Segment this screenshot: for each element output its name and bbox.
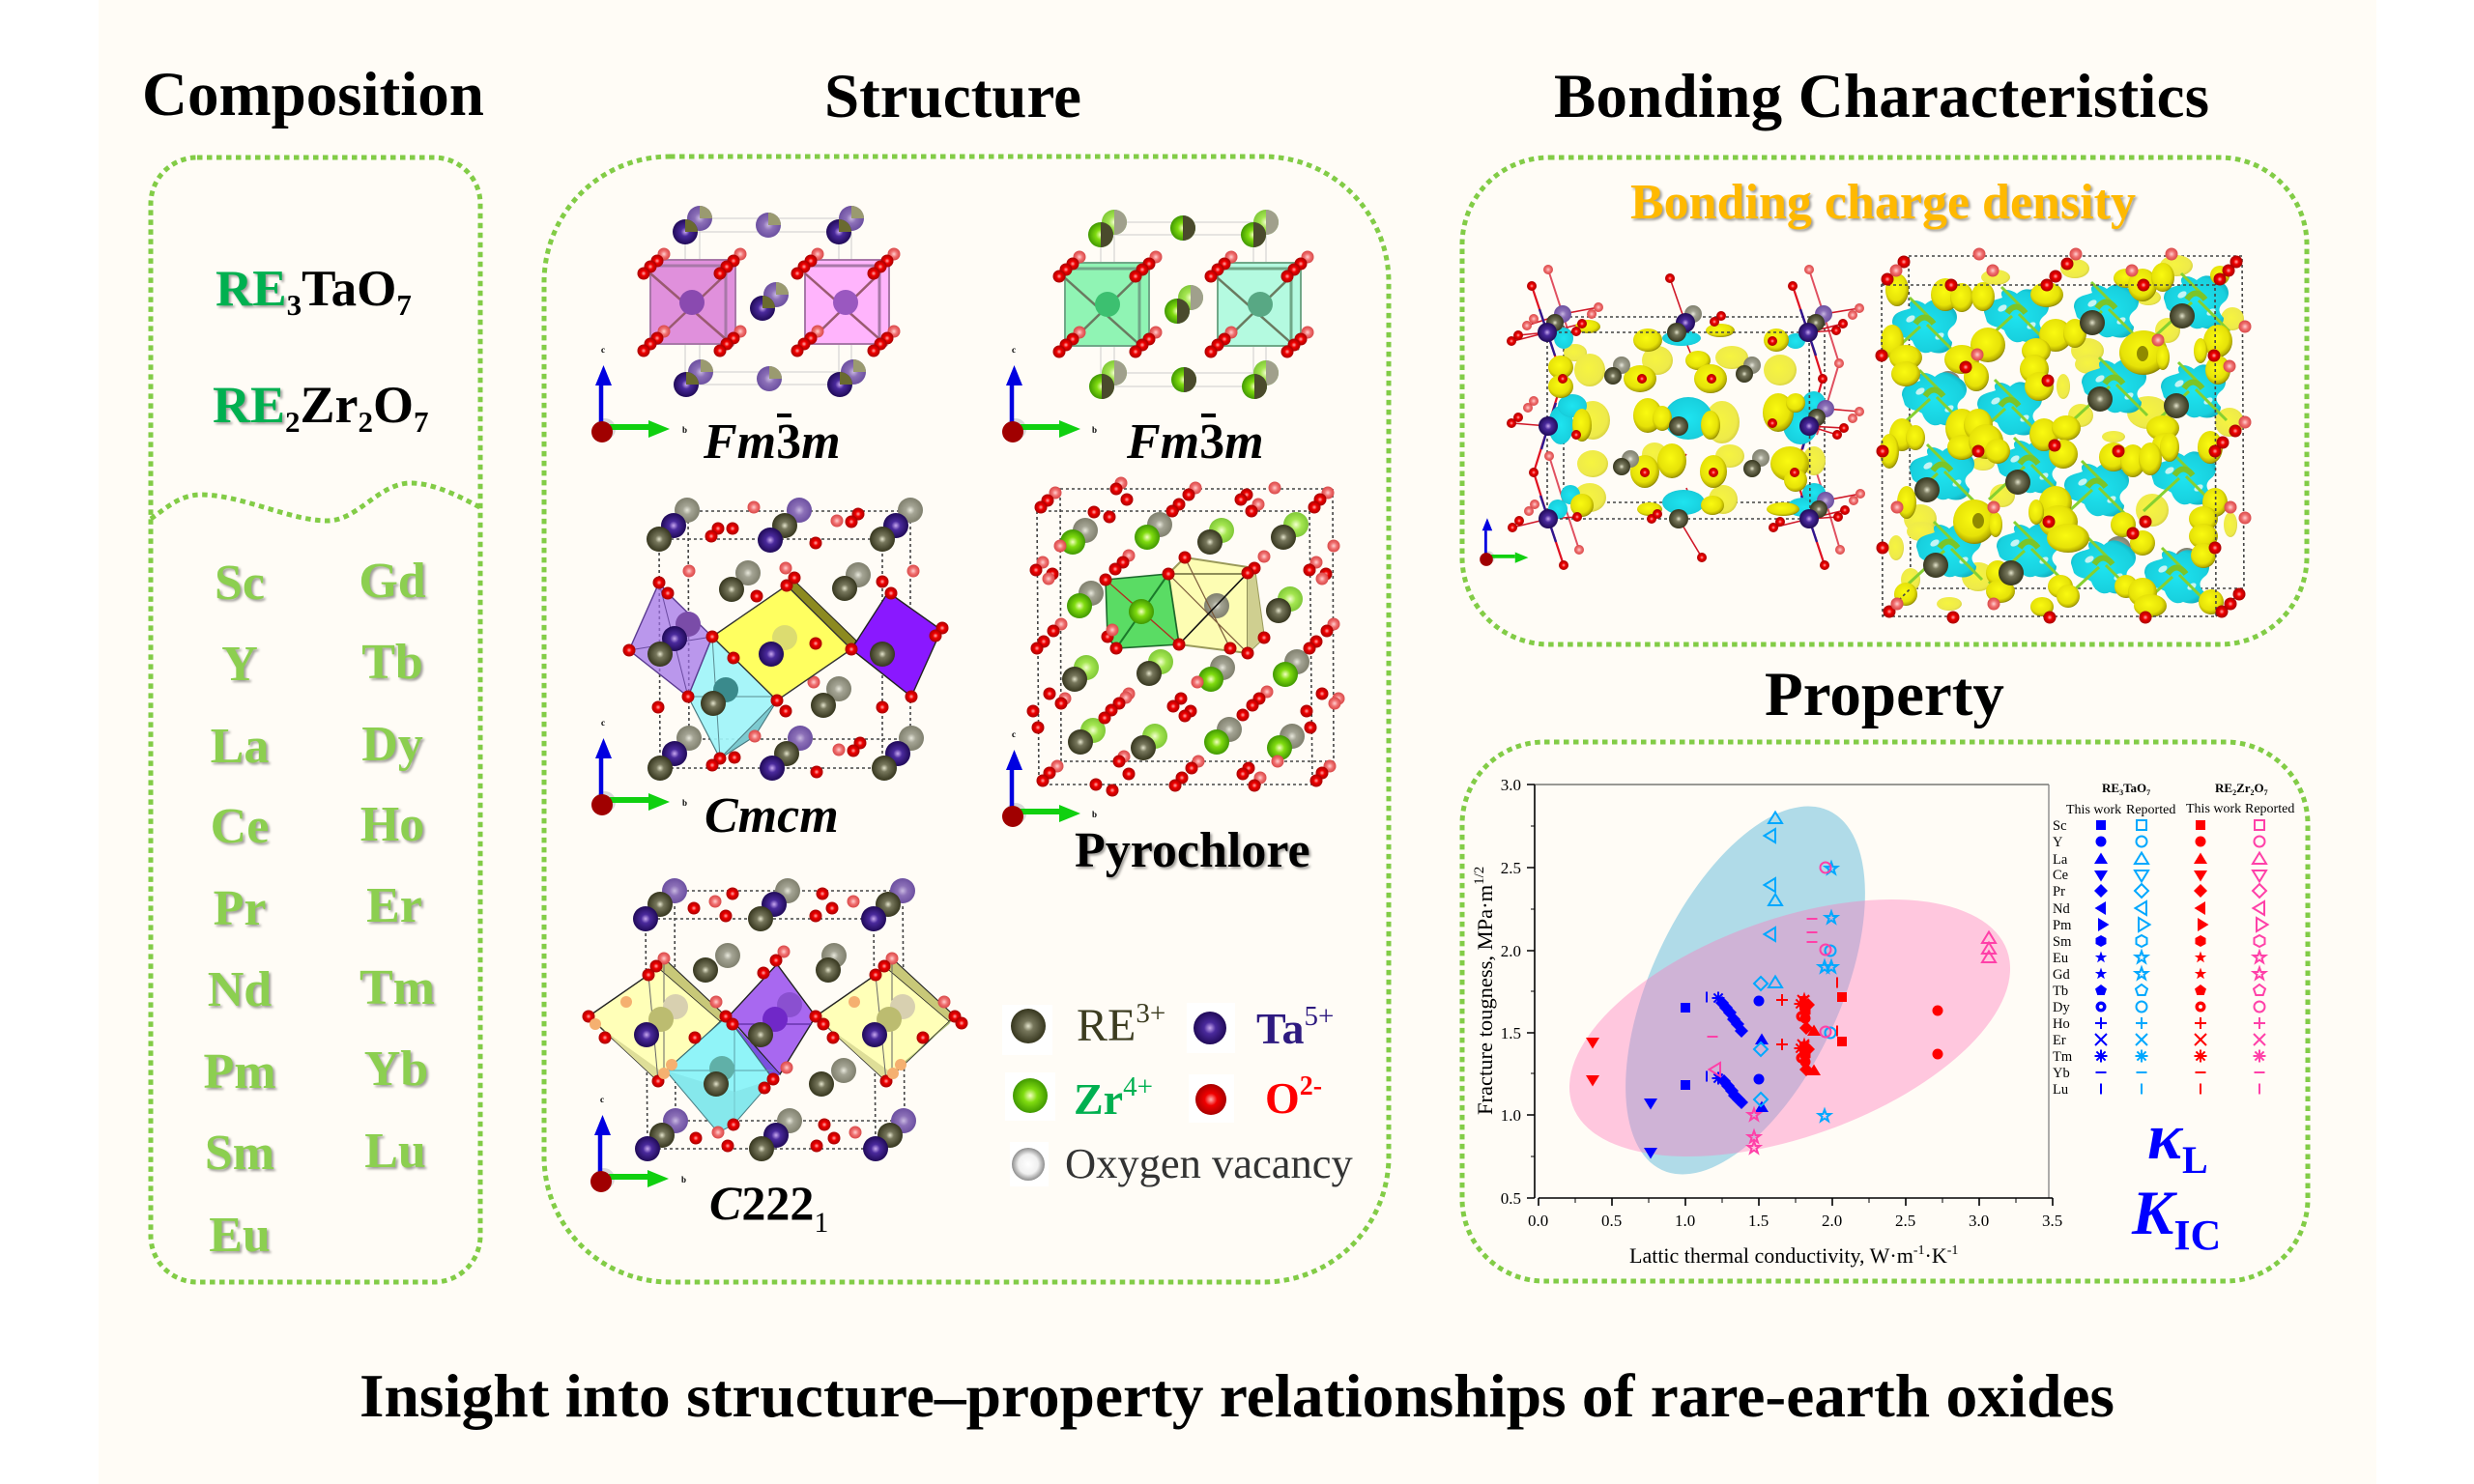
formula: RE2Zr2O7: 2 [285,405,301,439]
panel: composition [151,157,483,1282]
rare-earth element list: Ho [360,797,424,852]
rare-earth element list: Sm [205,1126,274,1181]
legend Zr4+ [1005,1071,1153,1124]
legend column headers: This work [2066,803,2121,817]
legend Ta5+: Ta [1256,1004,1304,1053]
legend markers [2094,820,2267,1094]
symbol: kappa L: L [2182,1138,2208,1182]
chart axes: 1.0 [1675,1212,1695,1230]
legend Ta5+ [1187,1001,1334,1053]
x axis label: -1 [1947,1243,1958,1258]
chart axes: 2.0 [1501,942,1521,960]
rare-earth element list: Er [366,878,422,933]
label: Cmcm: Cmcm [705,788,839,843]
charge density map: left [1507,265,1865,570]
label: Fm-3m left: Fm3m [703,414,841,470]
formula: RE2Zr2O7: 2 [359,405,373,439]
ellipse: RE2Zr2O7 region [1536,848,2044,1208]
rare-earth element list: Dy [361,717,423,772]
chart axes: 3.0 [1501,776,1521,794]
crystal: Pyrochlore [1026,477,1345,796]
legend row labels: Nd [2053,901,2070,917]
legend header: RE2Zr2O7: 7 [2264,788,2268,797]
rare-earth element list: Eu [209,1208,271,1263]
axes: Pyrochlore: c [1012,729,1016,739]
chart axes: 0.5 [1601,1212,1622,1230]
legend RE3+: 3+ [1136,998,1165,1029]
axes: Fm-3m left: b [682,425,687,435]
panel: structure [544,157,1389,1282]
crystal: C2221 [582,878,968,1161]
legend header: RE2Zr2O7: O [2255,781,2264,795]
legend header: RE3TaO7: 3 [2119,788,2123,797]
panel: bonding characteristics [1462,157,2307,644]
axes: Fm-3m left: c [601,345,605,355]
legend column headers: Reported [2126,803,2175,817]
legend header: RE2Zr2O7: 2 [2232,788,2236,797]
axes: Fm-3m left [591,345,687,442]
heading: Structure: Structure [824,62,1081,131]
rare-earth element list: Nd [208,962,272,1017]
rare-earth element list: Tb [361,635,423,690]
rare-earth element list [203,554,435,1263]
legend oxygen vacancy: Oxygen vacancy [1065,1139,1354,1187]
legend RE3+: RE [1077,1000,1136,1051]
legend Ta5+: 5+ [1304,1001,1334,1032]
chart axes: 0.0 [1528,1212,1548,1230]
legend row labels: Pm [2053,918,2072,933]
rare-earth element list: La [211,719,269,774]
subheading: bonding charge density: Bonding charge density [1630,175,2136,230]
axes: Cmcm: b [682,798,687,808]
formula: RE2Zr2O7: 7 [414,405,429,439]
legend column headers: Reported [2245,802,2294,816]
chart axes: 1.0 [1501,1106,1521,1125]
axes: Cmcm [591,718,687,815]
legend header: RE3TaO7: RE [2102,781,2119,795]
axes: C2221: c [600,1095,604,1104]
y axis label: Fracture tougness, MPa·m [1473,885,1497,1115]
chart axes: 2.5 [1501,859,1521,877]
marker legend [2053,781,2294,1098]
charge density map: right [1875,247,2252,624]
chart axes: 3.0 [1969,1212,1989,1230]
label: C2221: 1 [814,1207,828,1239]
legend header: RE2Zr2O7: 2 [2251,788,2255,797]
axes: Fm-3m right: b [1092,425,1097,435]
chart axes: 2.0 [1822,1212,1842,1230]
legend RE3+ [1002,998,1165,1055]
symbol: K IC: IC [2173,1212,2221,1259]
chart axes: 1.5 [1501,1024,1521,1042]
property dotted frame [1462,742,2308,1281]
structure dotted frame [544,157,1389,1282]
label: C2221: C222 [709,1176,814,1230]
legend header: RE3TaO7: TaO [2123,781,2146,795]
chart axes: 1.5 [1748,1212,1769,1230]
legend O2-: 2- [1300,1071,1322,1101]
rare-earth element list: Yb [364,1042,428,1097]
legend header: RE3TaO7: 7 [2146,788,2150,797]
legend header: RE2Zr2O7: RE [2215,781,2232,795]
legend row labels: Tb [2053,984,2068,999]
crystal: Fm-3m zirconate [1053,210,1314,399]
y axis label: 1/2 [1472,867,1487,885]
heading: Property: Property [1765,660,2004,729]
legend row labels: Tm [2053,1049,2073,1065]
x axis label: ·K [1925,1243,1947,1268]
legend column headers: This work [2186,802,2241,816]
panel: property [1462,742,2308,1281]
legend row labels: Pr [2053,884,2065,899]
label: Fm-3m right: Fm3m [1126,414,1264,470]
formula: RE3TaO7: TaO [302,261,396,317]
rare-earth element list: Y [221,637,258,692]
heading: Bonding Characteristics: Bonding Characteristics [1554,62,2209,131]
rare-earth element list: Lu [364,1124,426,1179]
legend row labels: La [2053,852,2068,868]
legend column headers [2066,802,2294,817]
chart axes: 2.5 [1895,1212,1915,1230]
legend O2-: O [1265,1073,1300,1123]
rare-earth element list: Pr [214,881,266,936]
axes: C2221 [590,1095,686,1192]
axes: Fm-3m right: c [1012,345,1016,355]
formula: RE2Zr2O7: RE [213,376,285,434]
formula: RE2Zr2O7: Zr [301,376,359,434]
axes: bonding [1480,518,1528,566]
legend: atoms [1002,998,1354,1187]
legend header: RE2Zr2O7: Zr [2236,781,2251,795]
crystal: Cmcm [622,498,949,781]
label: Pyrochlore: Pyrochlore [1075,823,1310,878]
axes: Fm-3m right [1002,345,1097,442]
legend row labels: Y [2053,835,2063,850]
legend row labels: Sm [2053,934,2072,950]
wavy divider [151,483,483,521]
crystal: Fm-3m tantalate [638,206,901,397]
formula: RE3TaO7: 7 [396,288,412,322]
data points [1586,812,1996,1159]
rare-earth element list: Pm [203,1044,276,1099]
formula: RE3TaO7: 3 [287,288,302,322]
composition dotted frame [151,157,480,1282]
x axis label: Lattic thermal conductivity, W·m [1629,1243,1913,1268]
legend Zr4+: Zr [1074,1074,1123,1124]
ellipse: RE3TaO7 region [1576,771,1914,1210]
legend row labels: Yb [2053,1066,2070,1081]
bonding dotted frame [1462,157,2307,644]
chart axes: 0.5 [1501,1189,1521,1208]
legend row labels: Ho [2053,1016,2070,1032]
symbol: kappa L: κ [2147,1099,2182,1173]
axes: Pyrochlore: b [1092,810,1097,819]
legend row labels: Lu [2053,1082,2068,1098]
legend row labels: Gd [2053,967,2070,983]
axes: Cmcm: c [601,718,605,728]
x axis label: -1 [1913,1243,1925,1258]
chart axes: 3.5 [2042,1212,2062,1230]
axes: Pyrochlore [1002,729,1097,827]
rare-earth element list: Gd [359,554,426,609]
legend row labels: Er [2053,1033,2066,1048]
formula: RE2Zr2O7: O [373,376,414,434]
legend row labels: Eu [2053,951,2068,966]
heading: Composition: Composition [142,60,484,129]
formula: RE3TaO7: RE [216,261,287,317]
rare-earth element list: Tm [360,960,435,1015]
legend Zr4+: 4+ [1123,1071,1153,1102]
scatter chart [1472,771,2062,1268]
rare-earth element list: Ce [211,799,269,854]
footer title: Insight into structure–property relationships of rare-earth oxides [360,1362,2114,1430]
axes: C2221: b [681,1175,686,1184]
legend row labels: Dy [2053,1000,2070,1015]
legend row labels: Ce [2053,868,2068,883]
symbol: K IC: K [2132,1179,2173,1248]
rare-earth element list: Sc [215,556,265,611]
legend row labels [2053,818,2073,1098]
legend row labels: Sc [2053,818,2066,834]
chart axes [1501,776,2062,1230]
legend O2- [1189,1071,1322,1123]
